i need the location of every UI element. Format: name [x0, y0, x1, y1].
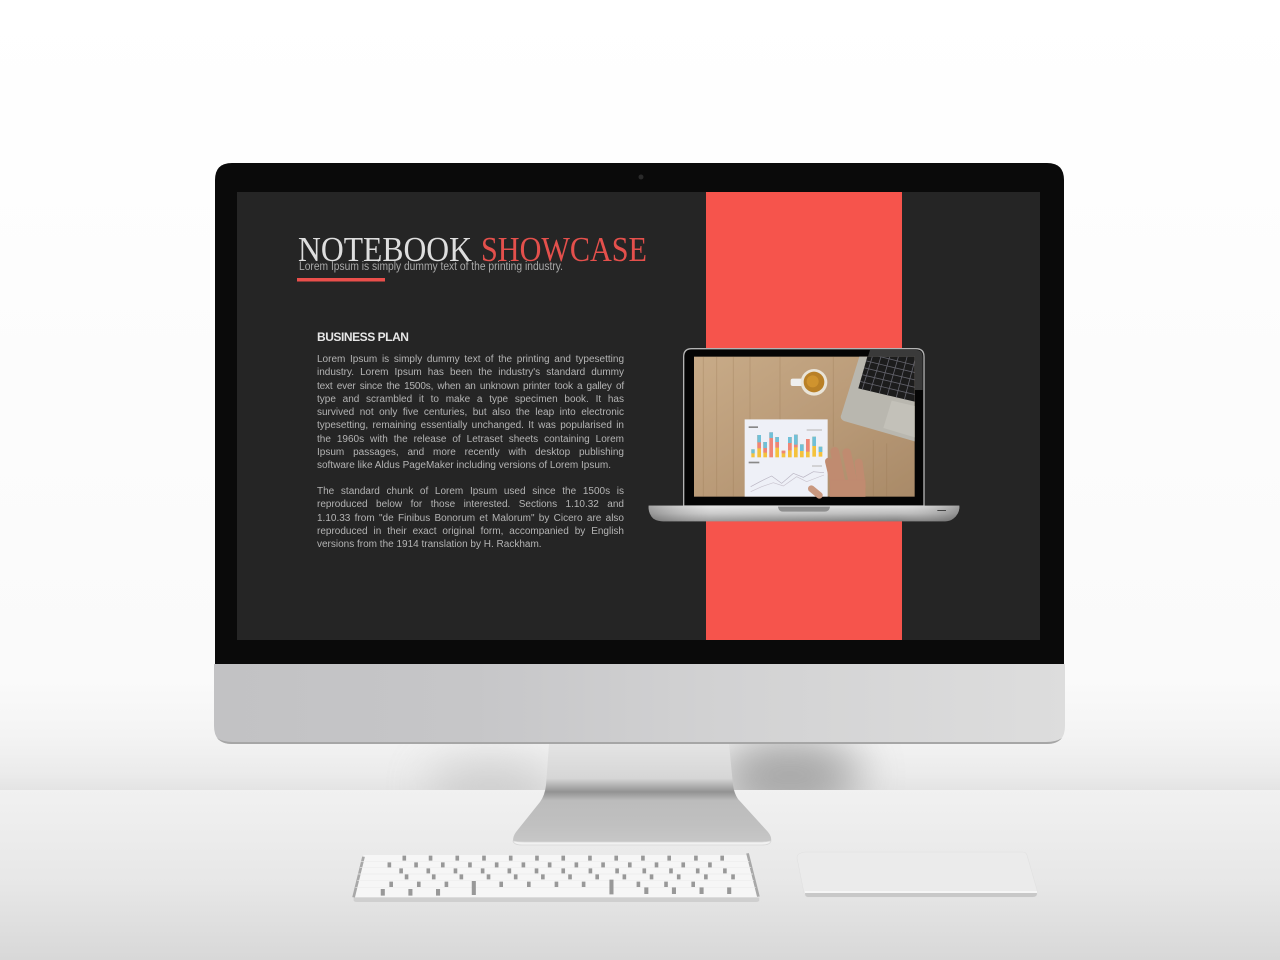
chin lower edge — [217, 738, 1062, 744]
title accent word: SHOWCASE — [481, 230, 647, 269]
laptop mockup — [649, 349, 959, 521]
hand — [811, 451, 865, 497]
photo on laptop screen — [694, 353, 917, 497]
report paper — [745, 419, 828, 497]
body paragraph one: the 1960s with the release of Letraset sheets containing Lorem — [317, 434, 624, 444]
body paragraph two: reproduced in their exact original form, accompanied by English — [317, 526, 624, 537]
body paragraph one: software like Aldus PageMaker including versions of Lorem Ipsum. — [317, 460, 611, 471]
body paragraph one: Lorem Ipsum is simply dummy text of the printing and typesetting — [317, 354, 624, 365]
subtitle: Lorem Ipsum is simply dummy text of the printing industry. — [299, 261, 563, 273]
laptop base — [649, 506, 959, 521]
bar chart — [751, 432, 822, 457]
trackpad — [797, 852, 1037, 897]
body paragraph one: industry. Lorem Ipsum has been the industry's standard dummy — [317, 367, 624, 378]
body paragraph one: survived not only five centuries, but also the leap into electronic — [317, 407, 624, 418]
body paragraph two: The standard chunk of Lorem Ipsum used since the 1500s is — [317, 486, 624, 497]
body paragraph two: versions from the 1914 translation by H. Rackham. — [317, 539, 542, 550]
keyboard — [354, 853, 759, 902]
body paragraph one: typesetting, remaining essentially unchanged. It was popularised in — [317, 420, 624, 431]
monitor chin — [214, 664, 1065, 744]
body paragraph one — [317, 354, 624, 471]
monitor bezel — [215, 163, 1064, 664]
body paragraph one: Ipsum passages, and more recently with desktop publishing — [317, 447, 624, 458]
body paragraph two — [317, 486, 624, 550]
body paragraph two: 1.10.33 from "de Finibus Bonorum et Malorum" by Cicero are also — [317, 512, 624, 524]
laptop lid — [684, 349, 924, 506]
section heading: business plan: BUSINESS PLAN — [317, 330, 408, 344]
coffee cup — [791, 369, 827, 396]
background laptop — [841, 353, 917, 441]
body paragraph one: text ever since the 1500s, when an unknown printer took a galley of — [317, 380, 624, 392]
desk surface — [0, 790, 1280, 960]
camera — [638, 174, 644, 180]
body paragraph two: reproduced below for those interested. Sections 1.10.32 and — [317, 499, 624, 510]
line chart — [751, 472, 824, 487]
title underline — [297, 278, 385, 282]
title: NOTEBOOK — [298, 230, 472, 269]
monitor stand — [513, 744, 771, 845]
monitor shadow on wall — [428, 744, 880, 790]
red vertical band — [706, 192, 902, 640]
slide screen — [237, 192, 1040, 640]
keyboard key gaps — [381, 856, 735, 896]
body paragraph one: type and scrambled it to make a type specimen book. It has — [317, 394, 624, 405]
